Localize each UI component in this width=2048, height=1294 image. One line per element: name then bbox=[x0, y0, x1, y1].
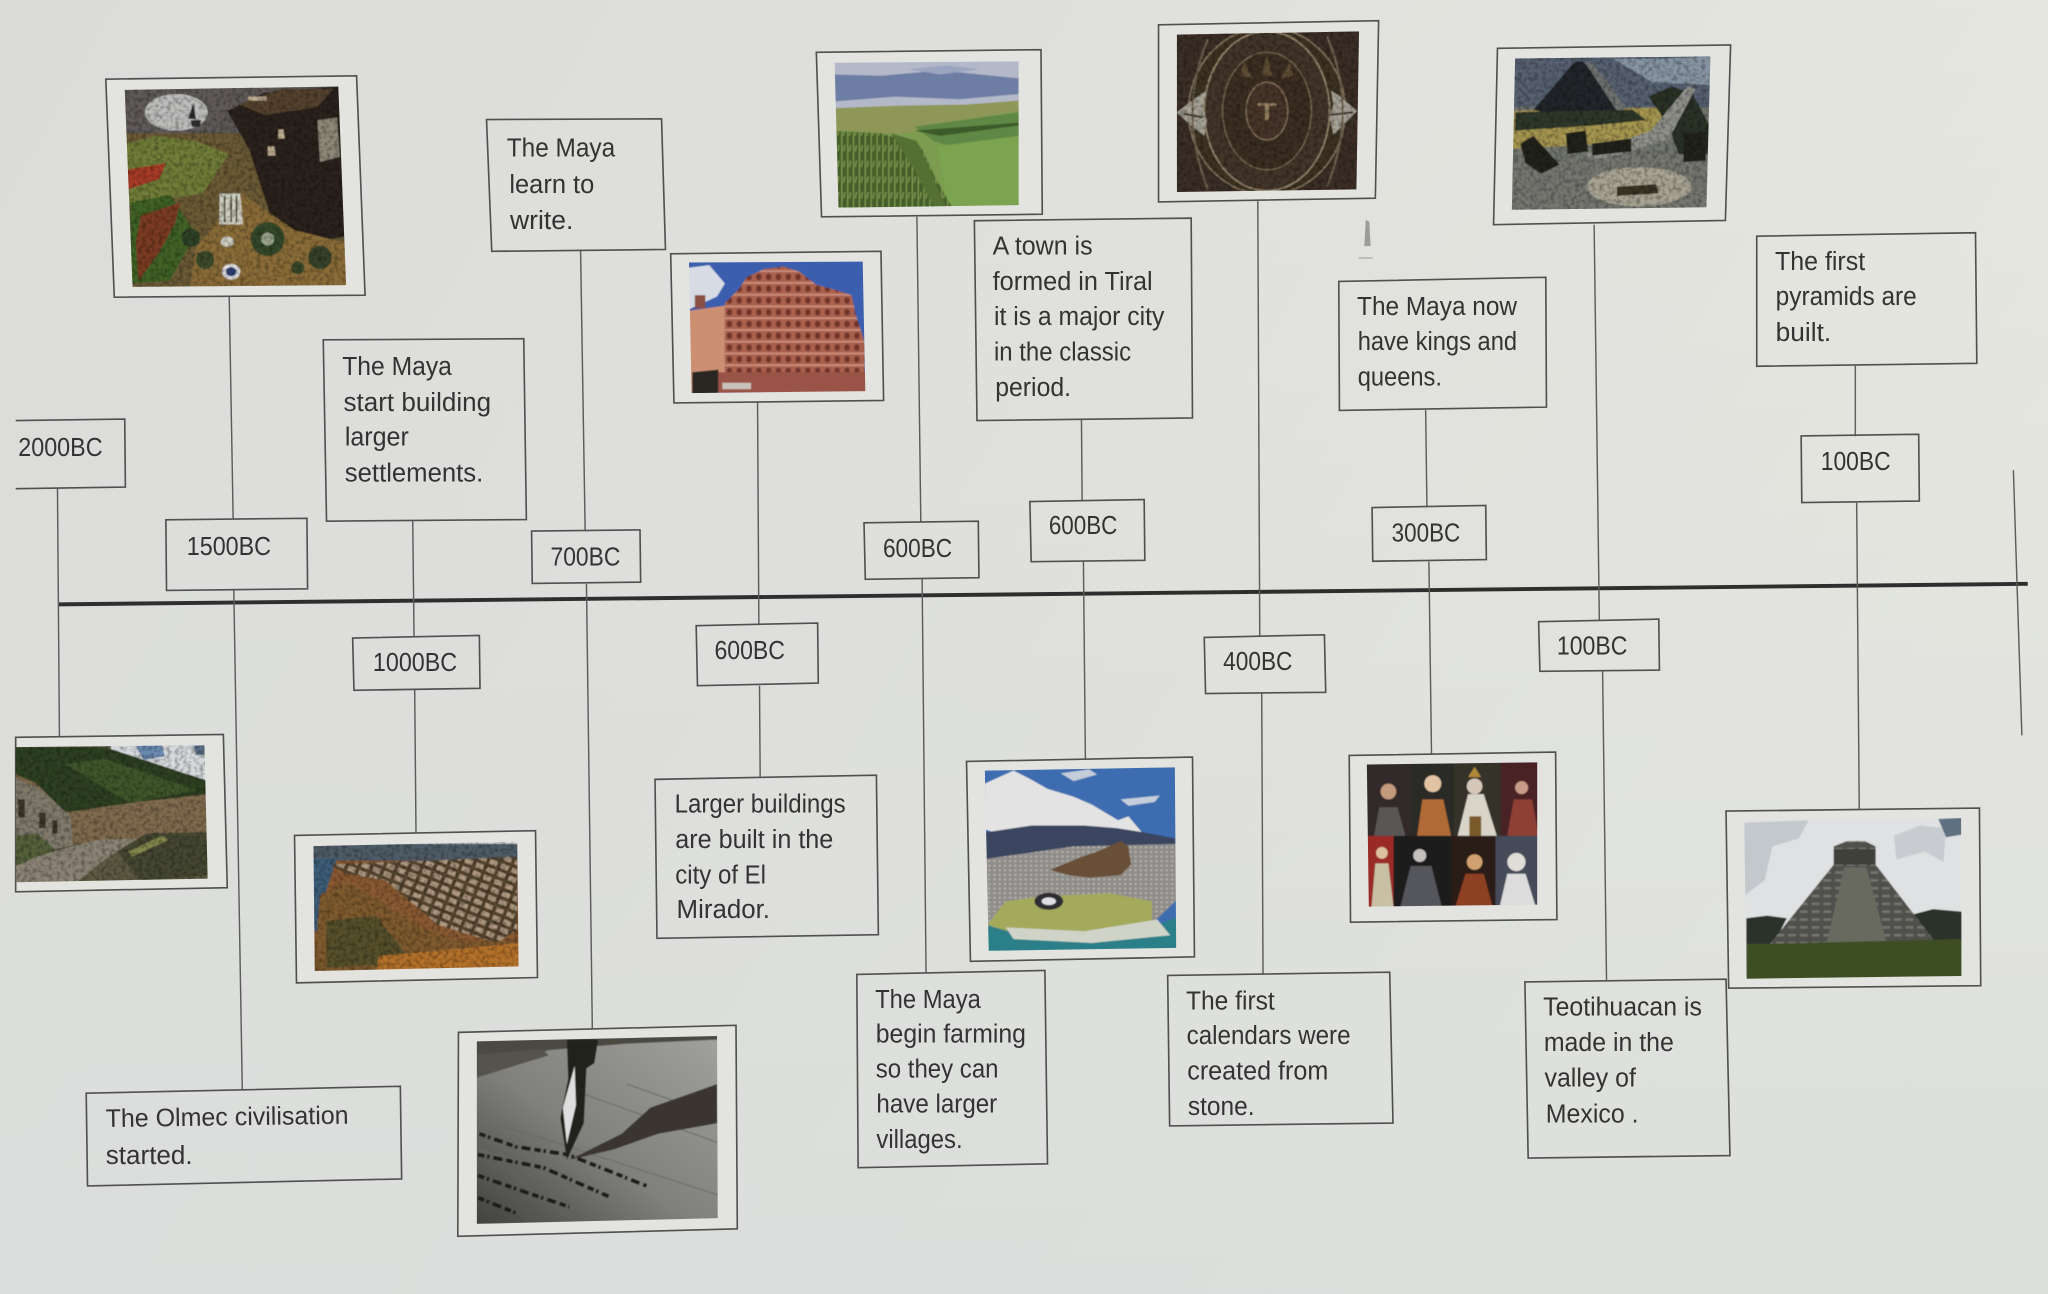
text box: a town in Tiral: in the classic bbox=[994, 339, 1131, 367]
picture: Olmec city bbox=[124, 86, 346, 287]
text box: begin farming: villages. bbox=[876, 1126, 963, 1154]
connector: 100BC pyramid image bbox=[1857, 503, 1859, 810]
date label: 600BC town: 600BC bbox=[1049, 512, 1117, 540]
date label: 700BC: 700BC bbox=[551, 544, 620, 572]
picture frame: palace bbox=[671, 251, 884, 403]
text box: first pyramids: built. bbox=[1776, 319, 1831, 347]
date label: 700BC bbox=[532, 530, 641, 583]
text box: kings and queens bbox=[1339, 277, 1546, 410]
text box: first calendars: stone. bbox=[1188, 1093, 1255, 1121]
connector: 1500BC to image bbox=[229, 297, 233, 519]
timeline axis bbox=[59, 584, 2028, 604]
picture frame: fountain pen bbox=[458, 1025, 737, 1236]
connector: 300BC image bbox=[1429, 562, 1432, 754]
picture frame: Chichen Itza pyramid bbox=[1726, 808, 1981, 988]
date label: 400BC bbox=[1204, 635, 1326, 694]
picture frame: Teotihuacan aerial bbox=[1494, 45, 1731, 225]
picture: pink palace bbox=[689, 262, 866, 394]
text box: larger buildings El Mirador bbox=[655, 775, 878, 938]
text box: larger buildings El Mirador: Larger buildings bbox=[675, 791, 846, 819]
picture frame: Cape Town aerial bbox=[967, 757, 1194, 961]
connector: 300BC text bbox=[1426, 410, 1427, 507]
text box: larger buildings El Mirador: city of El bbox=[675, 862, 766, 890]
connector: 400BC calendar image bbox=[1258, 201, 1260, 636]
text box: larger buildings El Mirador: Mirador. bbox=[677, 896, 770, 924]
picture frame: corn fields bbox=[816, 50, 1042, 217]
text box: The Maya learn to write: learn to bbox=[509, 171, 594, 199]
connector: 600BC farmland bbox=[917, 217, 921, 522]
date label: 300BC bbox=[1372, 505, 1486, 561]
connector: 600BC town image bbox=[1083, 562, 1085, 759]
picture: aerial coastal city bbox=[980, 764, 1182, 953]
connector: 100BC pyramids text bbox=[1854, 366, 1856, 436]
date label: 300BC: 300BC bbox=[1392, 519, 1460, 547]
connector: 600BC palace bbox=[758, 402, 759, 624]
text box: first calendars bbox=[1168, 972, 1393, 1126]
text box: larger settlements: The Maya bbox=[342, 353, 453, 381]
picture frame: kings and queens portraits bbox=[1349, 752, 1557, 922]
text box: begin farming: have larger bbox=[876, 1091, 998, 1119]
text box: kings and queens: have kings and bbox=[1358, 328, 1517, 356]
text box: first calendars: calendars were bbox=[1187, 1022, 1351, 1050]
text box: first pyramids: The first bbox=[1775, 248, 1865, 276]
date label: 600BC town bbox=[1030, 500, 1145, 562]
text box: kings and queens: queens. bbox=[1358, 363, 1442, 391]
text box: The Maya learn to write bbox=[487, 119, 665, 251]
connector: 700BC to text bbox=[581, 251, 585, 530]
text box: larger buildings El Mirador: are built in the bbox=[675, 826, 833, 854]
connector: 100BC Teotihuacan image bbox=[1594, 225, 1599, 620]
text box: Teotihuacan: valley of bbox=[1544, 1064, 1637, 1092]
picture: corn fields bbox=[829, 59, 1025, 210]
date label: 600BC palace: 600BC bbox=[714, 637, 785, 665]
timeline end marker bbox=[2013, 470, 2022, 735]
date label: 100BC Teotihuacan bbox=[1539, 619, 1659, 671]
date label: 600BC farming: 600BC bbox=[883, 535, 952, 563]
text box: a town in Tiral bbox=[974, 218, 1192, 421]
date label: 2000BC bbox=[16, 419, 125, 489]
picture frame: Olmec city painting bbox=[106, 76, 365, 297]
date label: 1500BC: 1500BC bbox=[187, 533, 271, 561]
date label: 100BC pyramids: 100BC bbox=[1821, 448, 1891, 476]
text box: a town in Tiral: it is a major city bbox=[994, 303, 1165, 331]
text box: Olmec civilisation bbox=[86, 1086, 402, 1186]
text box: begin farming: The Maya bbox=[875, 986, 982, 1014]
text box: Teotihuacan bbox=[1525, 979, 1730, 1158]
picture: fountain pen writing bbox=[470, 1032, 725, 1228]
connector: 100BC Teotihuacan text bbox=[1603, 671, 1607, 981]
text box: a town in Tiral: formed in Tiral bbox=[993, 268, 1153, 296]
date label: 1000BC bbox=[353, 635, 480, 690]
text box: Olmec civilisation: The Olmec civilisation bbox=[105, 1102, 349, 1133]
text box: Teotihuacan: made in the bbox=[1544, 1029, 1674, 1057]
connector: 400BC text bbox=[1262, 694, 1263, 974]
text box: first pyramids: pyramids are bbox=[1776, 283, 1917, 311]
picture: Teotihuacan aerial view bbox=[1512, 56, 1710, 210]
connector: 1000BC to image bbox=[415, 690, 416, 833]
picture: stone calendar bbox=[1176, 31, 1359, 192]
text box: first calendars: The first bbox=[1186, 988, 1275, 1016]
date label: 600BC farming bbox=[864, 521, 979, 579]
text box: begin farming: so they can bbox=[876, 1056, 999, 1084]
text box: first calendars: created from bbox=[1187, 1058, 1328, 1086]
text box: The Maya learn to write: write. bbox=[509, 207, 573, 235]
connector: 700BC to image bbox=[586, 584, 592, 1029]
text box: a town in Tiral: period. bbox=[995, 374, 1071, 402]
date label: 1000BC: 1000BC bbox=[373, 649, 457, 677]
text box: larger settlements: settlements. bbox=[345, 459, 483, 487]
text box: The Maya learn to write: The Maya bbox=[507, 135, 616, 163]
date label: 1500BC bbox=[166, 518, 308, 590]
text box: Teotihuacan: Mexico . bbox=[1546, 1100, 1639, 1128]
text box: larger settlements bbox=[323, 339, 526, 521]
text box: larger settlements: start building bbox=[344, 389, 491, 417]
date label: 100BC Teotihuacan: 100BC bbox=[1557, 632, 1627, 660]
text box: kings and queens: The Maya now bbox=[1357, 293, 1518, 321]
connector: 1500BC to text bbox=[234, 590, 242, 1089]
connector: 600BC farming text bbox=[922, 579, 926, 973]
text box: begin farming: begin farming bbox=[876, 1021, 1026, 1049]
picture frame: English village bbox=[0, 734, 227, 892]
picture: stone village bbox=[16, 745, 208, 882]
text box: first pyramids bbox=[1757, 233, 1977, 366]
connector: 1000BC to text bbox=[413, 521, 414, 637]
date label: 100BC pyramids bbox=[1801, 434, 1919, 503]
date label: 400BC: 400BC bbox=[1223, 648, 1292, 676]
text box: Olmec civilisation: started. bbox=[106, 1142, 193, 1170]
picture: settlement on cliff bbox=[314, 842, 518, 971]
text box: begin farming bbox=[857, 970, 1048, 1168]
text box: Teotihuacan: Teotihuacan is bbox=[1543, 993, 1702, 1021]
connector: 600BC town text bbox=[1080, 419, 1083, 500]
picture frame: stone calendar bbox=[1159, 21, 1379, 202]
picture: royal portraits collage bbox=[1365, 761, 1541, 908]
text box: a town in Tiral: A town is bbox=[993, 233, 1093, 261]
picture frame: settlement on cliff bbox=[295, 831, 537, 983]
date label: 600BC palace bbox=[696, 623, 818, 686]
connector: 2000BC bbox=[57, 489, 59, 737]
picture: stepped pyramid bbox=[1744, 818, 1962, 979]
text box: larger settlements: larger bbox=[345, 423, 409, 451]
connector: 600BC to text bbox=[759, 686, 761, 777]
date label: 2000BC: 2000BC bbox=[18, 434, 103, 462]
